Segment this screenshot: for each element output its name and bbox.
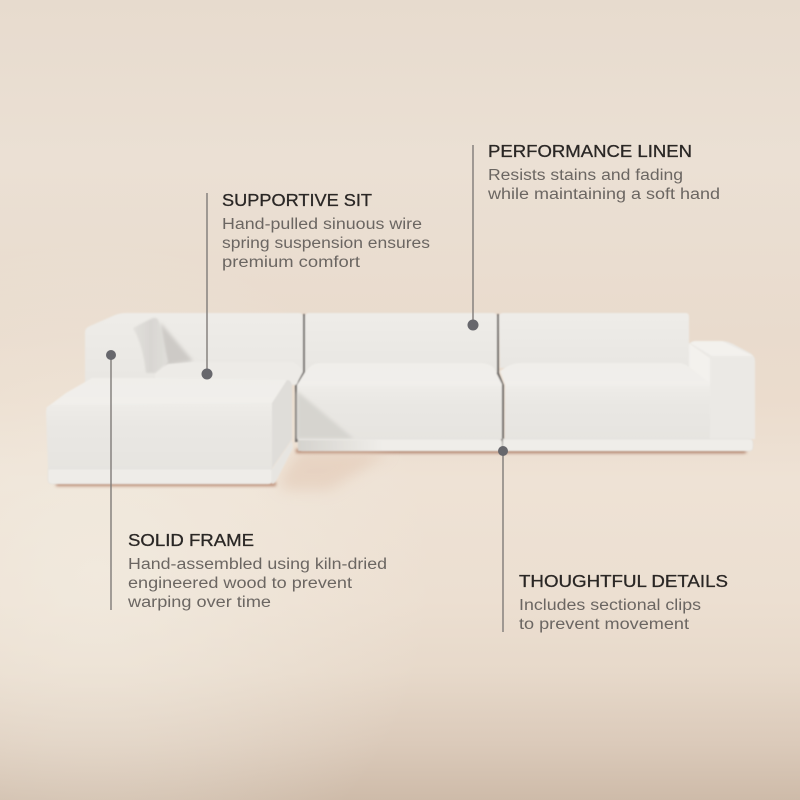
callout: thoughtful details: Includes sectional clips: [519, 597, 701, 614]
chaise base: [48, 469, 272, 484]
chaise front: [46, 403, 272, 469]
callout: solid frame: engineered wood to prevent: [128, 575, 353, 592]
callout: supportive sit: SUPPORTIVE SIT: [222, 190, 372, 210]
chaise top: [46, 378, 292, 408]
chaise side: [272, 380, 292, 468]
callout: supportive sit: Hand-pulled sinuous wire: [222, 216, 422, 233]
callout: performance linen: PERFORMANCE LINEN: [488, 141, 692, 161]
callout: thoughtful details: to prevent movement: [519, 616, 690, 633]
floor shadow: [56, 449, 746, 490]
callout: solid frame: warping over time: [127, 594, 271, 611]
inner arm: [133, 318, 168, 373]
right module: [499, 313, 755, 451]
callout: solid frame: Hand-assembled using kiln-dried: [128, 556, 387, 573]
gaps between modules: [295, 314, 305, 442]
callout: supportive sit: [202, 190, 430, 380]
callout: performance linen: Resists stains and fading: [488, 167, 683, 184]
left chaise module: [46, 313, 303, 484]
callout: solid frame: [106, 350, 387, 611]
callout: performance linen: while maintaining a soft hand: [487, 186, 720, 203]
callout: supportive sit: spring suspension ensures: [222, 235, 430, 252]
callout: thoughtful details: [498, 446, 728, 633]
back: [85, 313, 303, 385]
callout: solid frame: SOLID FRAME: [128, 530, 254, 550]
callout: supportive sit: premium comfort: [222, 254, 361, 271]
middle module: [297, 313, 502, 451]
callout: thoughtful details: THOUGHTFUL DETAILS: [519, 571, 728, 591]
arm shadow: [160, 322, 193, 366]
sofa illustration: [46, 313, 755, 490]
seat behind: [155, 362, 302, 384]
callout: performance linen: [468, 141, 720, 330]
